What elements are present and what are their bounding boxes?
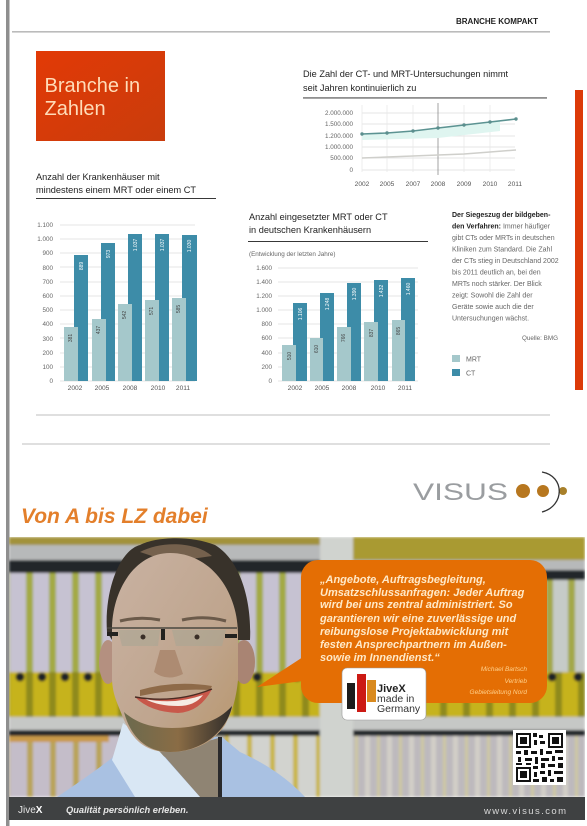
line chart: Untersuchungen xyxy=(325,103,522,188)
bar chart: Geräte: 2008 xyxy=(342,385,357,392)
lanyard xyxy=(218,737,222,797)
bar values: 973 xyxy=(106,250,112,258)
bar chart: Geräte: 600 xyxy=(261,335,272,342)
badge: JiveX made in Germany: Germany xyxy=(377,703,421,715)
ears xyxy=(99,640,117,684)
bar chart: Geräte: 2002 xyxy=(288,385,303,392)
bars: MRT xyxy=(64,298,186,381)
bar chart: Geräte: 1.600 xyxy=(256,265,272,272)
binder holes xyxy=(20,672,578,682)
text block: Der Siegeszug: Der Siegeszug der bildgeben- xyxy=(452,212,551,219)
bar chart: Krankenhäuser: 200 xyxy=(42,350,53,357)
line chart: Untersuchungen: 1.200.000 xyxy=(325,133,353,140)
text block: Der Siegeszug: der CTs stieg in Deutschland 2002 xyxy=(452,258,559,265)
legend: CT xyxy=(466,370,476,378)
bar chart: Krankenhäuser: 600 xyxy=(42,293,53,300)
bar values: 1.030 xyxy=(187,240,193,252)
quote text: „Angebote, Auftragsbegleitung, xyxy=(319,574,486,586)
heading: Krankenhäuser: mindestens einem MRT oder einem CT xyxy=(36,185,196,195)
quote text xyxy=(319,574,525,664)
bar values: 542 xyxy=(122,311,128,319)
badge: JiveX made in Germany xyxy=(342,668,426,720)
footer bar: Qualität persönlich erleben. xyxy=(66,805,188,815)
bar chart: Krankenhäuser: 2011 xyxy=(176,385,190,392)
logo: VISUS: VISUS xyxy=(413,479,508,506)
QR code xyxy=(513,730,566,785)
bar values: 610 xyxy=(314,345,320,353)
text block: Der Siegeszug: MRTs noch stärker. Der Blick xyxy=(452,281,542,288)
bar chart: Geräte: 1.200 xyxy=(256,293,272,300)
bar chart: Krankenhäuser: 100 xyxy=(42,364,53,371)
bar chart: Krankenhäuser: 300 xyxy=(42,336,53,343)
title box: Branche in Zahlen xyxy=(36,51,165,141)
quote text: sowie im Innendienst.“ xyxy=(320,652,440,664)
bar chart: Krankenhäuser: 400 xyxy=(42,321,53,328)
bar chart: Krankenhäuser: 2002 xyxy=(68,385,83,392)
bar chart: Geräte: 2011 xyxy=(398,385,412,392)
bar values: 837 xyxy=(369,329,375,337)
bars: CT xyxy=(293,278,415,381)
badge: JiveX made in Germany: JiveX xyxy=(377,683,406,695)
badge: JiveX made in Germany: made in xyxy=(377,693,415,705)
bar values: 889 xyxy=(79,262,85,270)
beard xyxy=(124,706,232,752)
bar chart: Geräte: 200 xyxy=(261,364,272,371)
attribution xyxy=(470,666,527,696)
bar values: 571 xyxy=(149,307,155,315)
bar chart: Krankenhäuser: 900 xyxy=(42,250,53,257)
legend xyxy=(452,355,482,378)
photo: office shelves xyxy=(9,537,585,797)
line chart: Untersuchungen: 2007 xyxy=(406,181,421,188)
bar chart: Krankenhäuser: 1.100 xyxy=(37,222,53,229)
bar values: 865 xyxy=(396,327,402,335)
bar values: 1.037 xyxy=(133,239,139,251)
eyebrows xyxy=(120,618,226,621)
line chart: Untersuchungen: 2008 xyxy=(431,181,446,188)
text block: Der Siegeszug: gibt CTs oder MRTs in deutschen xyxy=(452,235,555,242)
heading: Geräte xyxy=(248,212,428,258)
shirt collar xyxy=(112,723,200,797)
bar chart: Geräte: 2010 xyxy=(371,385,386,392)
quote text: garantieren wir eine zuverlässige und xyxy=(319,613,517,625)
line chart: Untersuchungen: 500.000 xyxy=(330,155,353,162)
bar values: 1.390 xyxy=(352,288,358,300)
text block: Der Siegeszug xyxy=(452,212,559,342)
heading: Untersuchungen xyxy=(303,69,547,98)
text block: Der Siegeszug: Kliniken zum Standard. Die Zahl xyxy=(452,246,552,254)
bar chart: Geräte: 1.400 xyxy=(256,279,272,286)
moustache shadow xyxy=(140,684,212,696)
nose xyxy=(154,650,183,678)
bar chart: Krankenhäuser xyxy=(37,222,197,392)
bar values: 766 xyxy=(341,334,347,342)
text block: Der Siegeszug: Untersuchungen wächst. xyxy=(452,316,529,322)
attribution: Gebietsleitung Nord xyxy=(470,689,527,696)
right red margin bar xyxy=(575,90,583,390)
quote text: wird bei uns zentral administriert. So xyxy=(320,599,513,611)
legend: MRT xyxy=(466,356,482,364)
face xyxy=(112,553,238,752)
speech bubble xyxy=(257,560,547,703)
quote text: festen Ansprechpartnern im Außen- xyxy=(320,639,507,651)
neck xyxy=(135,737,222,797)
hair xyxy=(107,538,250,640)
bar values: 1.432 xyxy=(379,285,385,297)
heading: Krankenhäuser: Anzahl der Krankenhäuser mit xyxy=(36,172,160,182)
bar chart: Krankenhäuser: 0 xyxy=(49,378,53,385)
quote text: reibungslose Projektabwicklung mit xyxy=(320,626,510,638)
bar chart: Geräte: 800 xyxy=(261,321,272,328)
bars: MRT xyxy=(282,320,405,381)
headline: Von A bis LZ dabei: Von A bis LZ dabei xyxy=(21,505,209,528)
line chart: Untersuchungen: 2010 xyxy=(483,181,498,188)
bar chart: Krankenhäuser: 2005 xyxy=(95,385,110,392)
page edge shadow xyxy=(6,0,10,826)
quote text: Umsatzschlussanfragen: Jeder Auftrag xyxy=(320,587,525,599)
line chart: Untersuchungen: 1.000.000 xyxy=(325,144,353,151)
line chart: Untersuchungen: 1.500.000 xyxy=(325,121,353,128)
line chart: Untersuchungen: 0 xyxy=(349,167,353,174)
photo: man portrait xyxy=(57,538,305,797)
running header: BRANCHE KOMPAKT xyxy=(456,17,538,26)
bar values: 510 xyxy=(287,352,293,360)
bar values: 1.460 xyxy=(406,283,412,295)
bar values: 585 xyxy=(176,305,182,313)
bar chart: Geräte xyxy=(256,265,418,392)
line chart: Untersuchungen: 2005 xyxy=(380,181,395,188)
footer bar xyxy=(9,797,585,820)
heading: Geräte: (Entwicklung der letzten Jahre) xyxy=(249,251,335,258)
title box: Branche in Zahlen: Zahlen xyxy=(44,98,106,120)
line chart: Untersuchungen: 2011 xyxy=(508,181,522,188)
text block: Der Siegeszug: Geräte sowie auch die der xyxy=(452,304,534,311)
heading: Untersuchungen: Die Zahl der CT- und MRT-Untersuchungen nimmt xyxy=(303,69,509,79)
bar chart: Geräte: 2005 xyxy=(315,385,330,392)
attribution: Vertrieb xyxy=(504,678,527,685)
footer bar: JiveX xyxy=(18,805,43,816)
attribution: Michael Bartsch xyxy=(481,666,527,673)
bar values xyxy=(287,283,412,360)
bar chart: Krankenhäuser: 700 xyxy=(42,279,53,286)
line chart: Untersuchungen: 2.000.000 xyxy=(325,110,353,117)
bar values: 437 xyxy=(96,326,102,334)
bar chart: Geräte: 1.000 xyxy=(256,307,272,314)
text block: Der Siegeszug: bis 2011 deutlich an, bei den xyxy=(452,270,541,276)
bar chart: Krankenhäuser: 1.000 xyxy=(37,236,53,243)
bar values: 1.037 xyxy=(160,239,166,251)
text block: Der Siegeszug: Quelle: BMG xyxy=(522,335,558,342)
bar chart: Krankenhäuser: 2008 xyxy=(123,385,138,392)
series: CT line xyxy=(362,119,516,134)
heading: Untersuchungen: seit Jahren kontinuierlich zu xyxy=(303,83,416,93)
bar chart: Geräte: 0 xyxy=(268,378,272,385)
bars: CT xyxy=(74,234,197,381)
text block: Der Siegeszug: den Verfahren: Immer häufiger xyxy=(452,224,551,230)
glasses xyxy=(107,628,237,646)
series: MRT line xyxy=(362,150,516,158)
heading: Geräte: in deutschen Krankenhäusern xyxy=(249,225,371,235)
bar values: 1.248 xyxy=(325,298,331,310)
bar chart: Krankenhäuser: 800 xyxy=(42,265,53,272)
bar values xyxy=(68,239,193,342)
title box: Branche in Zahlen: Branche in xyxy=(44,75,140,97)
bar values: 381 xyxy=(68,334,74,342)
shirt shoulders xyxy=(57,735,305,797)
heading: Geräte: Anzahl eingesetzter MRT oder CT xyxy=(249,212,388,222)
line chart: Untersuchungen: 2009 xyxy=(457,181,472,188)
footer bar: www.visus.com xyxy=(483,806,566,817)
bar chart: Krankenhäuser: 2010 xyxy=(151,385,166,392)
text block: Der Siegeszug: zeigt: Sowohl die Zahl der xyxy=(452,292,533,300)
logo: VISUS xyxy=(413,472,567,512)
heading: Krankenhäuser xyxy=(36,172,216,199)
bar chart: Geräte: 400 xyxy=(261,350,272,357)
mouth xyxy=(135,689,212,713)
bar values: 1.106 xyxy=(298,308,304,320)
divider lines xyxy=(22,415,550,444)
line chart: Untersuchungen: 2002 xyxy=(355,181,370,188)
bar chart: Krankenhäuser: 500 xyxy=(42,307,53,314)
